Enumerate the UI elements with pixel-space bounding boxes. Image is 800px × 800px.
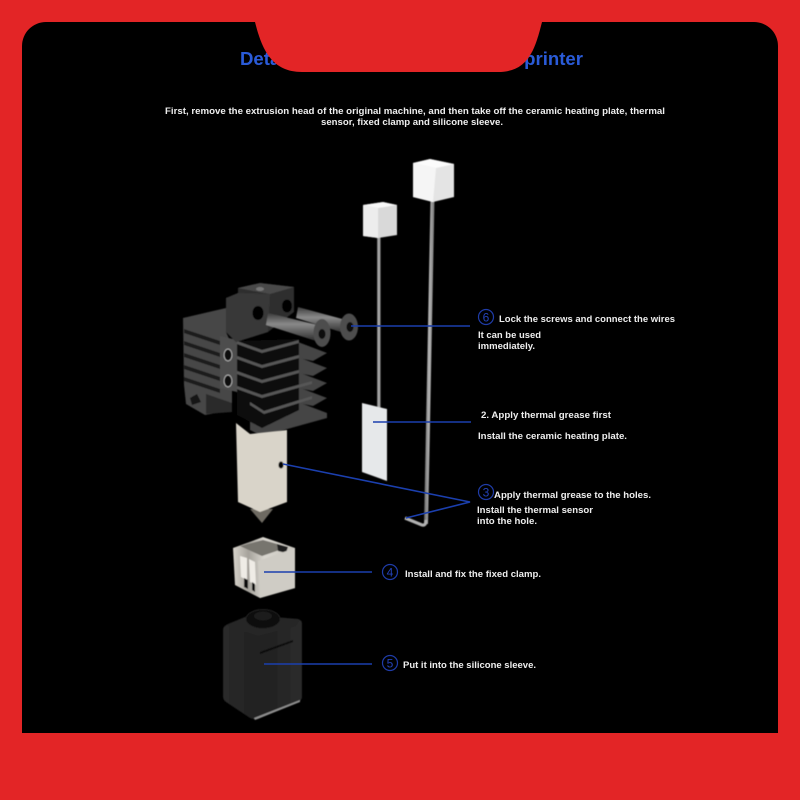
step 3 text [477,490,651,527]
ceramic heating plate [362,403,387,481]
step 2 callout [373,410,627,442]
title: Detailed steps to install on the sprinter [240,49,583,69]
thermal sensor rod with cube [405,159,454,525]
step 6 number badge [478,310,494,324]
step 4 callout [264,564,541,580]
heatsink front column with holes [220,336,237,392]
intro text: First, remove the extrusion head of the original machine, and then take off the ceramic heating plate, thermal [165,106,665,117]
step 3 callout [283,464,651,527]
step 5 callout [264,656,536,671]
step 3 text: into the hole. [477,516,537,527]
step 2 text: Install the ceramic heating plate. [478,431,627,442]
step 2 leader line [373,421,471,423]
step 3 leader lines [283,464,470,518]
heater top block [226,283,294,342]
step 5 number badge: 5 [387,656,394,670]
step 4 leader line [264,571,372,573]
step 4 number badge [382,564,398,580]
step 5 text: Put it into the silicone sleeve. [403,660,536,671]
fixed clamp [233,537,295,598]
step 3 number badge [478,484,494,500]
step 3 number badge: 3 [483,486,490,500]
silicone sleeve [223,610,302,720]
step 3 text: Apply thermal grease to the holes. [494,490,651,501]
intro text: sensor, fixed clamp and silicone sleeve. [321,117,503,128]
front screw [266,313,330,347]
heatsink front fins [237,339,312,428]
step 2 text [478,410,627,442]
step 6 text [478,314,675,352]
step 4 text: Install and fix the fixed clamp. [405,569,541,580]
red top notch [255,22,542,72]
step 5 leader line [264,663,372,665]
step 2 text: 2. Apply thermal grease first [481,410,612,421]
step 6 text: immediately. [478,341,535,352]
step 6 text: Lock the screws and connect the wires [499,314,675,325]
step 3 text: Install the thermal sensor [477,505,593,516]
step 6 leader line [351,325,470,327]
nozzle block [236,423,287,523]
step 6 number badge: 6 [483,310,490,324]
short thermal rod with cube [363,202,397,408]
step 6 callout [351,310,675,352]
intro text [165,106,665,128]
step 5 number badge [382,656,398,670]
heatsink right wing fins [250,342,327,436]
heatsink left wing [183,308,232,415]
hotend heatsink assembly [183,283,358,436]
rear screw [296,307,358,340]
step 4 number badge: 4 [387,566,394,580]
step 6 text: It can be used [478,330,541,341]
